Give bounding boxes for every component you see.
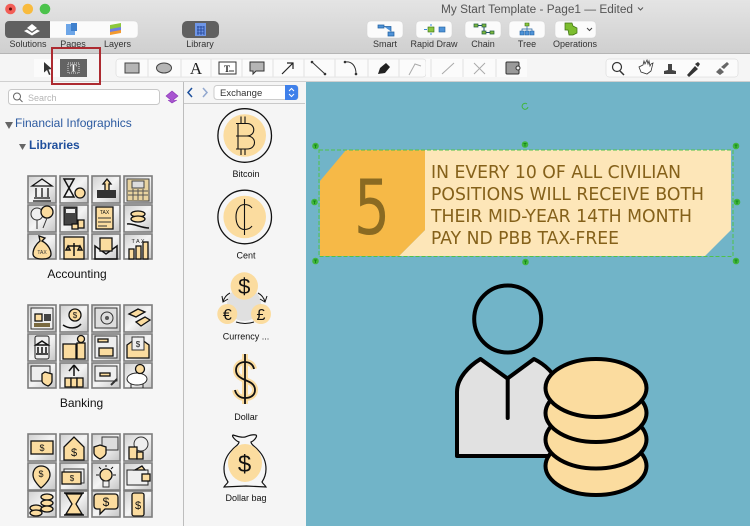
banner number block	[320, 150, 425, 256]
smart button	[367, 21, 403, 49]
drawing tools	[116, 59, 527, 78]
rotate handle	[522, 103, 528, 109]
toolbar group: solutions pages layers: Solutions	[9, 39, 47, 49]
banking label: Banking	[60, 396, 103, 410]
library: accounting: TAX	[37, 250, 47, 256]
toolbar group: solutions pages layers: Layers	[104, 39, 132, 49]
banner text: THEIR MID-YEAR 14TH MONTH	[430, 207, 692, 227]
library: exchange: $	[38, 469, 44, 479]
libraries heading: Libraries	[29, 138, 80, 152]
banner	[320, 150, 731, 256]
library: banking	[28, 305, 152, 388]
library: exchange: $	[71, 447, 77, 459]
drawing tools: A	[190, 59, 203, 78]
middle panel	[184, 82, 306, 526]
search box	[8, 90, 160, 104]
red highlight box	[52, 48, 100, 84]
pointer tool	[34, 59, 60, 77]
accounting label: Accounting	[47, 267, 107, 281]
library button: Library	[186, 39, 214, 49]
icon: currency exchange	[217, 272, 271, 324]
toolbar group: solutions pages layers	[5, 21, 138, 49]
icon: currency exchange: £	[257, 307, 266, 324]
search options icon	[166, 91, 178, 103]
icon: person with coins	[457, 286, 646, 495]
library: exchange: $	[135, 500, 141, 512]
icon: bitcoin	[218, 109, 272, 162]
secondary toolbar	[0, 54, 750, 82]
dollar bag label: Dollar bag	[225, 493, 267, 503]
library: accounting: T A X	[131, 239, 145, 245]
dollar label: Dollar	[234, 412, 258, 422]
library button	[182, 21, 219, 49]
toolbar group: solutions pages layers: Pages	[60, 39, 86, 49]
chain button	[465, 21, 501, 49]
window controls	[5, 4, 50, 14]
rapid draw button	[410, 21, 458, 49]
right tools	[606, 59, 738, 77]
icon: cent	[218, 190, 272, 244]
banner text: PAY ND PBB TAX-FREE	[431, 229, 619, 249]
window title: My Start Template - Page1 — Edited	[441, 4, 633, 16]
rapid draw button: Rapid Draw	[410, 39, 458, 49]
library: banking: $	[136, 340, 141, 349]
icon: currency exchange: $	[238, 274, 250, 299]
exchange dropdown	[214, 85, 298, 100]
library: exchange: $	[70, 474, 75, 483]
icon: dollar	[235, 354, 255, 404]
person body	[457, 359, 559, 456]
icon: dollar bag: $	[238, 451, 251, 478]
search box: Search	[28, 93, 57, 103]
coin stack	[546, 359, 646, 495]
banner text	[430, 163, 704, 249]
library: exchange: $	[103, 495, 110, 509]
icon: currency exchange: €	[223, 307, 232, 324]
person head	[474, 286, 541, 352]
icon: dollar bag	[224, 435, 266, 487]
text tool selected: T	[70, 64, 77, 74]
operations button: Operations	[553, 39, 598, 49]
chain button: Chain	[471, 39, 495, 49]
nav arrows	[188, 88, 192, 97]
number 5: 5	[354, 163, 390, 252]
currency label: Currency ...	[223, 332, 269, 342]
operations button	[553, 21, 598, 49]
tree heading: Financial Infographics	[15, 116, 132, 130]
exchange dropdown: Exchange	[220, 88, 262, 99]
text tool selected	[60, 59, 87, 77]
banner text: IN EVERY 10 OF ALL CIVILIAN	[431, 163, 681, 183]
title bar	[0, 0, 750, 54]
library: accounting: TAX	[100, 210, 110, 216]
cent label: Cent	[236, 250, 256, 260]
banner text: POSITIONS WILL RECEIVE BOTH	[431, 185, 704, 205]
library: accounting	[28, 176, 152, 259]
tree button	[509, 21, 545, 49]
library: exchange: $	[39, 443, 45, 453]
bitcoin label: Bitcoin	[232, 169, 260, 179]
selection frame	[311, 141, 740, 265]
left panel	[0, 82, 184, 526]
drawing tools: T	[224, 64, 230, 74]
tree button: Tree	[518, 39, 536, 49]
library: exchange	[28, 434, 152, 517]
library: banking: $	[73, 311, 78, 320]
smart button: Smart	[373, 39, 397, 49]
canvas	[306, 82, 750, 526]
banner light panel	[399, 150, 731, 256]
